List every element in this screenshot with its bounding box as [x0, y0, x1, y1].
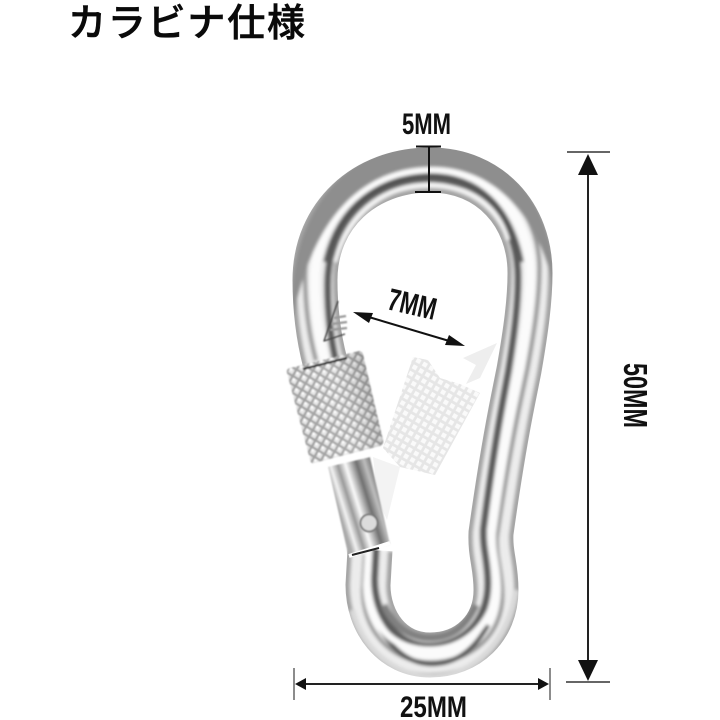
ghost: open gate position [373, 343, 497, 520]
label 50MM: 50MM [617, 363, 654, 428]
ghost screw tip [463, 343, 497, 384]
double arrow [353, 312, 465, 346]
width arrow [294, 668, 550, 700]
ghost sleeve [383, 357, 480, 475]
dimension: 25mm width [294, 668, 550, 720]
dimension: 50mm height [566, 152, 654, 682]
dimension: 7mm gate opening [353, 282, 465, 346]
label 5MM: 5MM [402, 108, 451, 141]
top dark line [325, 175, 522, 262]
outer mid-grey stripe [305, 163, 539, 662]
knurled sleeve [287, 351, 383, 463]
height arrow [566, 152, 610, 682]
carabiner body tube [291, 142, 556, 677]
gate lower tube [349, 462, 369, 549]
gate pin [360, 514, 378, 532]
gate split line [349, 543, 390, 556]
thickness marker [415, 146, 441, 192]
screw thread [324, 301, 347, 341]
bottom dark crescent [378, 625, 488, 664]
top under-highlight [335, 185, 508, 262]
dimension: 5mm wire thickness [402, 108, 451, 192]
inner dark stripe [328, 178, 518, 646]
central white stripe [315, 170, 530, 655]
label 7MM: 7MM [384, 282, 440, 327]
carabiner [291, 142, 556, 677]
title: カラビナ仕様 [68, 3, 305, 45]
ghost gate tube [373, 457, 400, 520]
outer pale lower edge [352, 590, 516, 677]
top shaded crescent [292, 148, 552, 314]
